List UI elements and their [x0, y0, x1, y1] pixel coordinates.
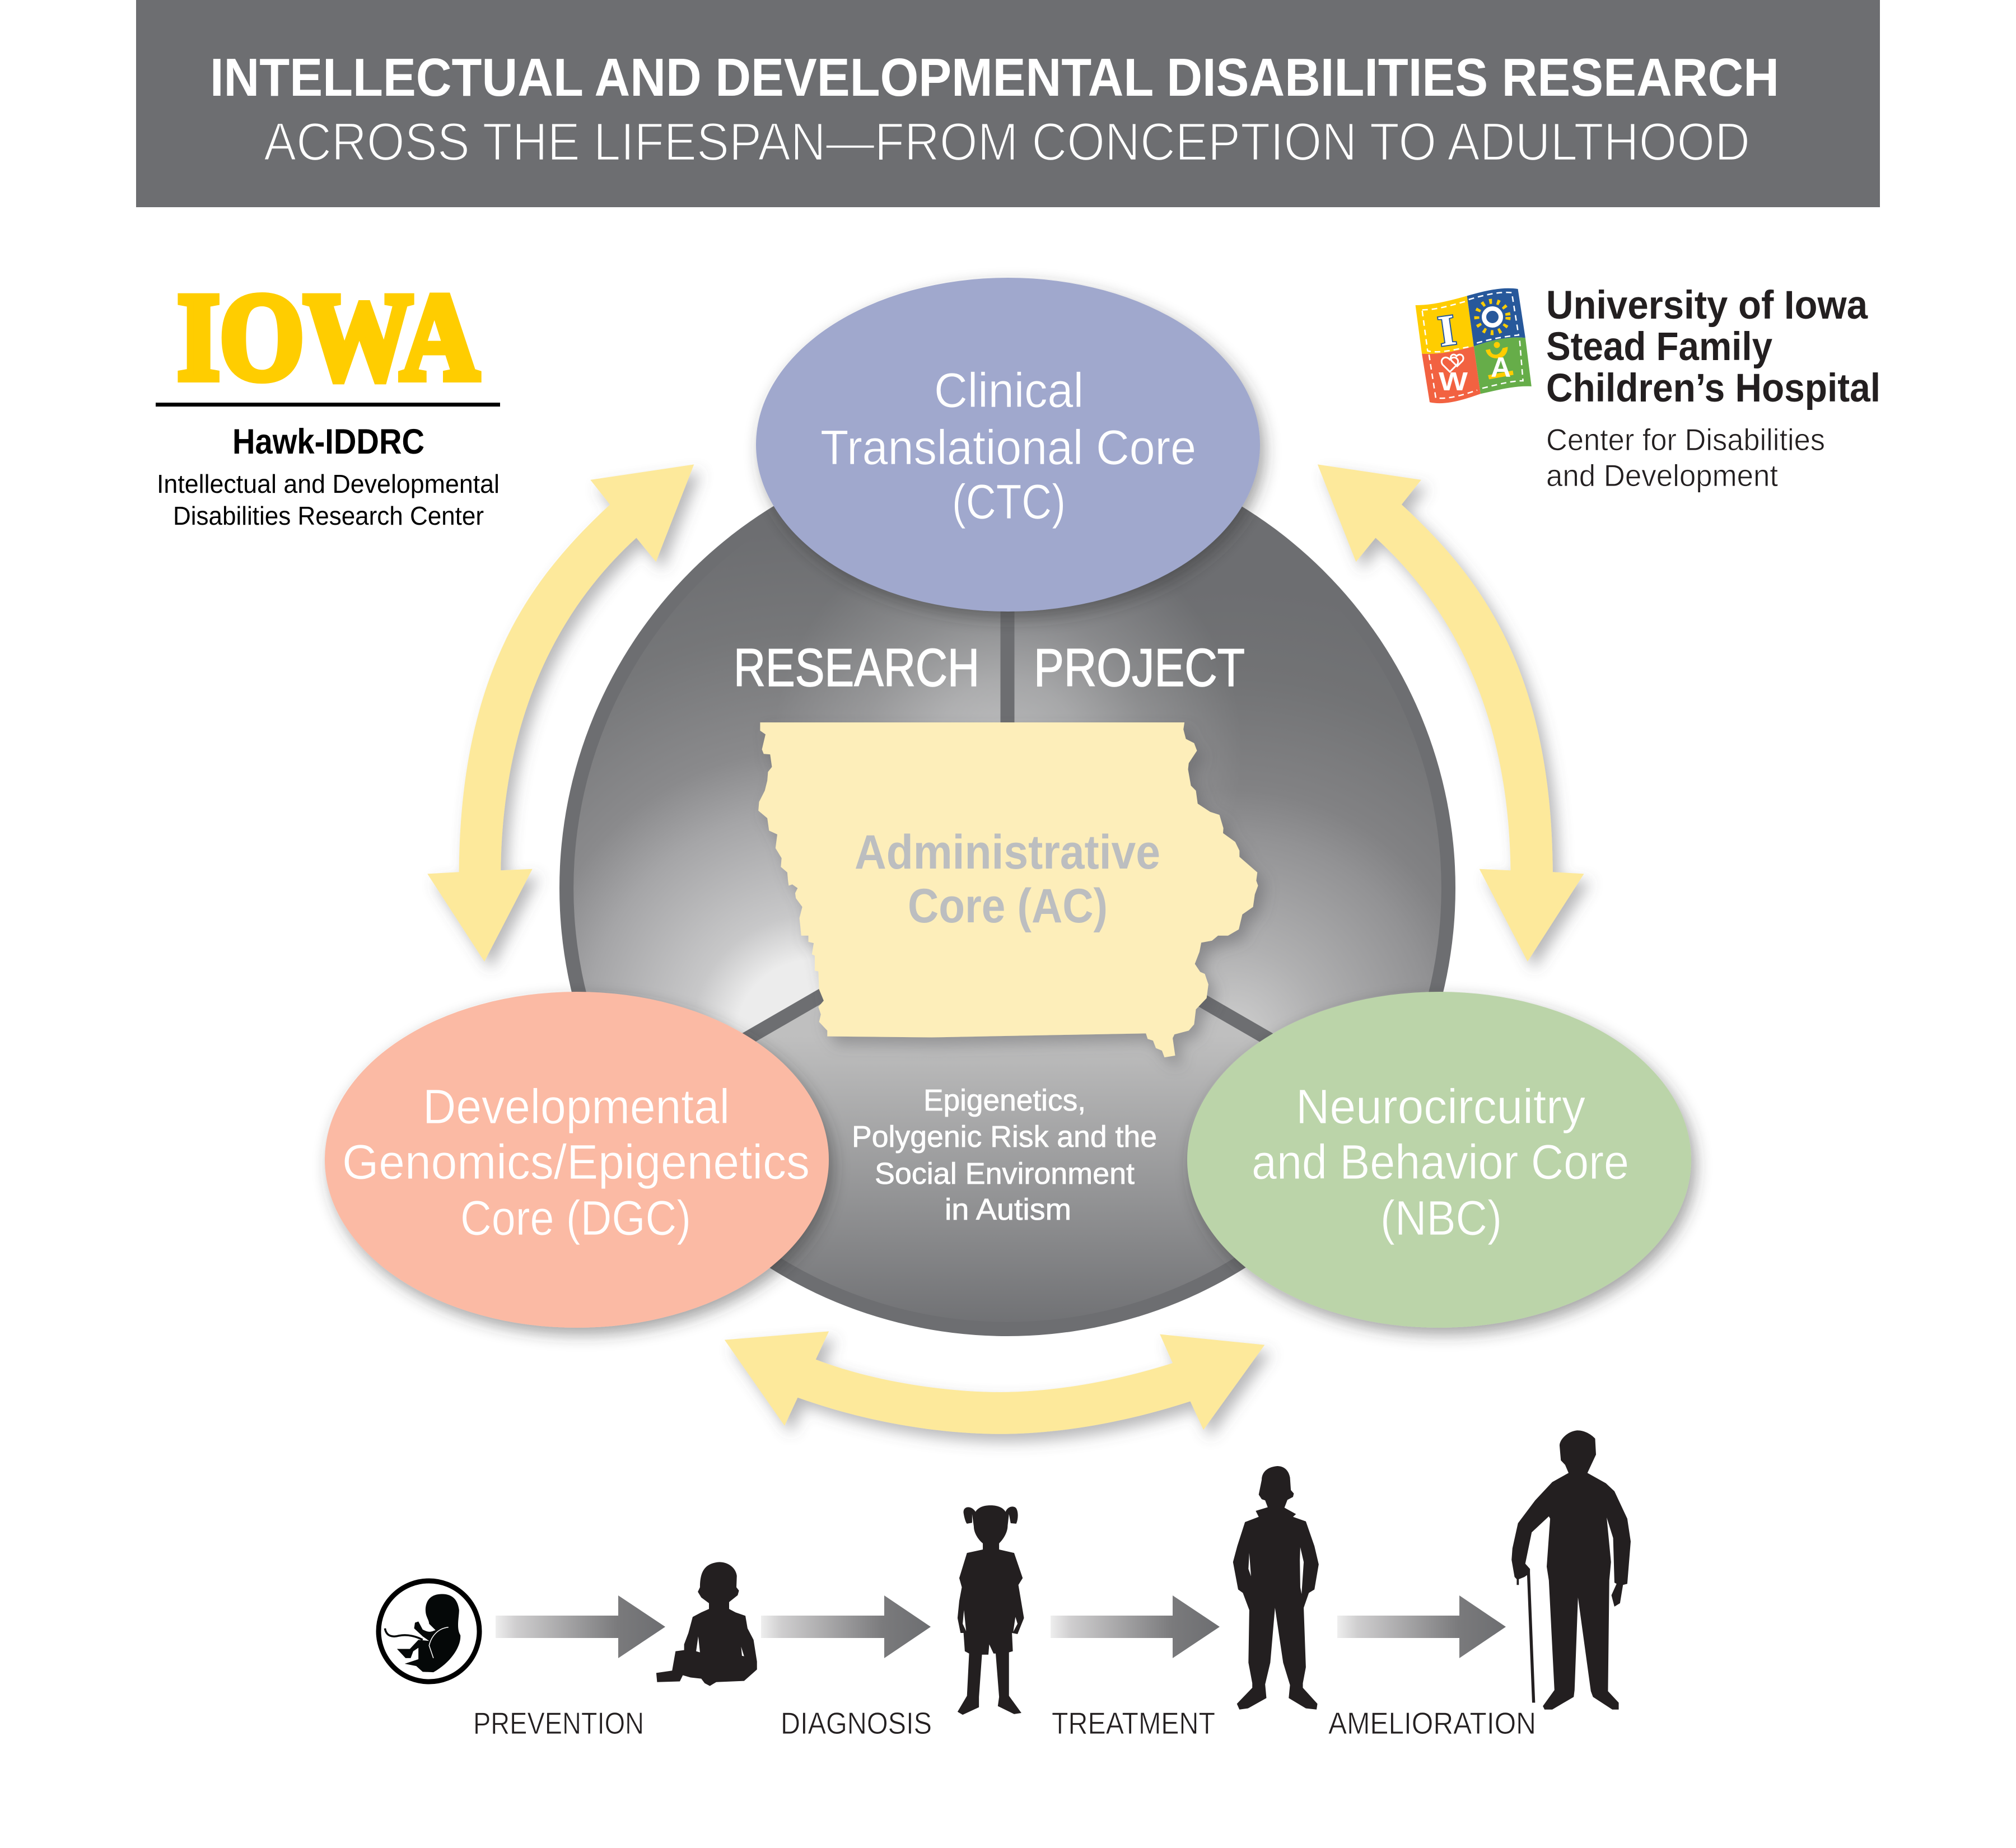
arrow: diagnosis [761, 1595, 931, 1658]
Hawk-IDDRC name: Hawk-IDDRC [232, 422, 424, 461]
hospital name: University of Iowa [1546, 283, 1868, 328]
IOWA wordmark: IOWA [178, 268, 479, 406]
label: diagnosis: DIAGNOSIS [781, 1706, 932, 1740]
panel: clinical translational core: (CTC) [952, 475, 1066, 529]
project description: Social Environment [875, 1157, 1135, 1191]
administrative core: Iowa state shape: Core (AC) [908, 879, 1108, 933]
title line two: ACROSS THE LIFESPAN—FROM CONCEPTION TO ADULTHOOD [264, 112, 1750, 172]
arrow: left two-way yellow [427, 464, 694, 962]
Iowa Hawk-IDDRC logo block [156, 268, 500, 530]
panel: developmental genomics core: Developmental [423, 1080, 730, 1134]
arrow: amelioration [1337, 1595, 1506, 1658]
project description: Polygenic Risk and the [852, 1120, 1157, 1154]
project description: in Autism [945, 1193, 1071, 1226]
research label: RESEARCH [734, 638, 979, 698]
arrow: right two-way yellow [1318, 464, 1584, 962]
panel: neurocircuitry and behavior core: and Behavior Core [1252, 1135, 1629, 1189]
administrative core: Iowa state shape [758, 722, 1258, 1057]
label: treatment: TREATMENT [1052, 1706, 1215, 1740]
arrow: prevention [496, 1595, 665, 1658]
icon: young girl [958, 1505, 1024, 1715]
header banner [136, 0, 1880, 207]
icon: adult man [1233, 1466, 1319, 1710]
panel: developmental genomics core: Genomics/Epigenetics [342, 1135, 810, 1189]
panel: developmental genomics core: Core (DGC) [460, 1191, 691, 1245]
icon: elderly man with cane [1511, 1430, 1631, 1710]
panel: clinical translational core: Translational Core [820, 421, 1196, 475]
arrow: treatment [1051, 1595, 1220, 1658]
icon: fetus in circle [379, 1581, 479, 1682]
panel: clinical translational core [756, 278, 1260, 612]
icon: seated baby [656, 1562, 757, 1686]
label: amelioration: AMELIORATION [1328, 1706, 1536, 1740]
icon: quilt flag: W [1439, 367, 1468, 396]
panel: neurocircuitry and behavior core [1187, 992, 1691, 1328]
project description [852, 1084, 1157, 1226]
panel: clinical translational core: Clinical [934, 363, 1084, 418]
icon: quilt flag [1416, 288, 1532, 403]
Stead Family Children's Hospital logo block: Stead Family [1546, 325, 1772, 369]
title line one: INTELLECTUAL AND DEVELOPMENTAL DISABILITIES RESEARCH [210, 48, 1779, 108]
panel: developmental genomics core [325, 992, 829, 1328]
Stead Family Children's Hospital logo block: and Development [1546, 458, 1778, 493]
Stead Family Children's Hospital logo block: Children’s Hospital [1546, 366, 1880, 410]
central research project circle [559, 440, 1455, 1336]
project description: Epigenetics, [923, 1084, 1086, 1117]
Iowa Hawk-IDDRC logo block: Disabilities Research Center [173, 501, 484, 530]
panel: neurocircuitry and behavior core: (NBC) [1380, 1191, 1502, 1245]
lifespan timeline [379, 1430, 1631, 1740]
administrative core label: Administrative [855, 825, 1160, 879]
center full name: Intellectual and Developmental [157, 469, 500, 498]
label: prevention: PREVENTION [473, 1706, 644, 1740]
icon: quilt flag: I [1435, 305, 1459, 356]
center name: Center for Disabilities [1546, 422, 1825, 457]
arrow: bottom two-way yellow [725, 1331, 1264, 1434]
icon: quilt flag: A [1491, 352, 1511, 383]
Stead Family Children's Hospital logo block [1416, 283, 1880, 493]
panel: neurocircuitry and behavior core: Neurocircuitry [1296, 1080, 1585, 1134]
project label: PROJECT [1034, 638, 1245, 698]
